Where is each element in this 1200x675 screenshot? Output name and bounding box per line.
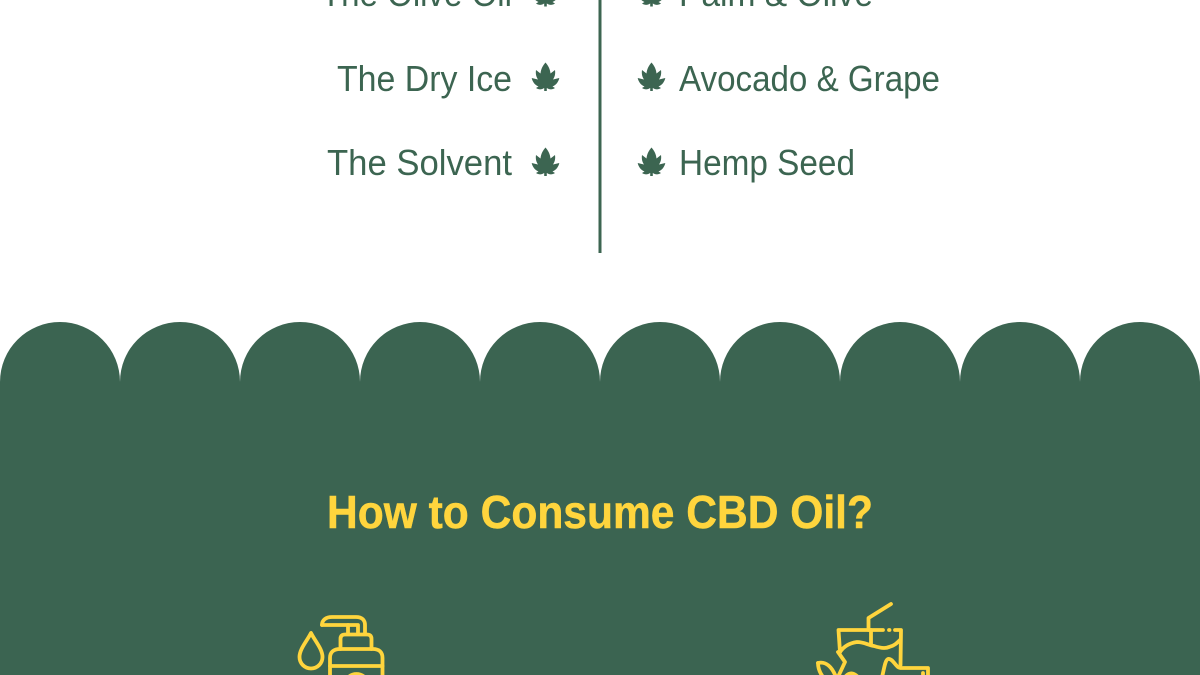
list item: The Solvent: The Solvent (327, 142, 512, 183)
center divider line (598, 0, 602, 253)
panel: how to consume section with scalloped top (0, 322, 1200, 675)
list item: Hemp Seed: Hemp Seed (679, 142, 855, 183)
list item: The Dry Ice: The Dry Ice (337, 58, 512, 99)
icon: juice glass with straw and fruit (818, 604, 928, 675)
heading: How to Consume CBD Oil? (327, 486, 873, 538)
panel: extraction methods list (321, 0, 559, 183)
icon: oil drop and pump bottle (300, 617, 382, 675)
panel: carrier oils list (638, 0, 940, 183)
scalloped green background (0, 322, 1200, 675)
list item: Avocado & Grape: Avocado & Grape (679, 58, 940, 99)
